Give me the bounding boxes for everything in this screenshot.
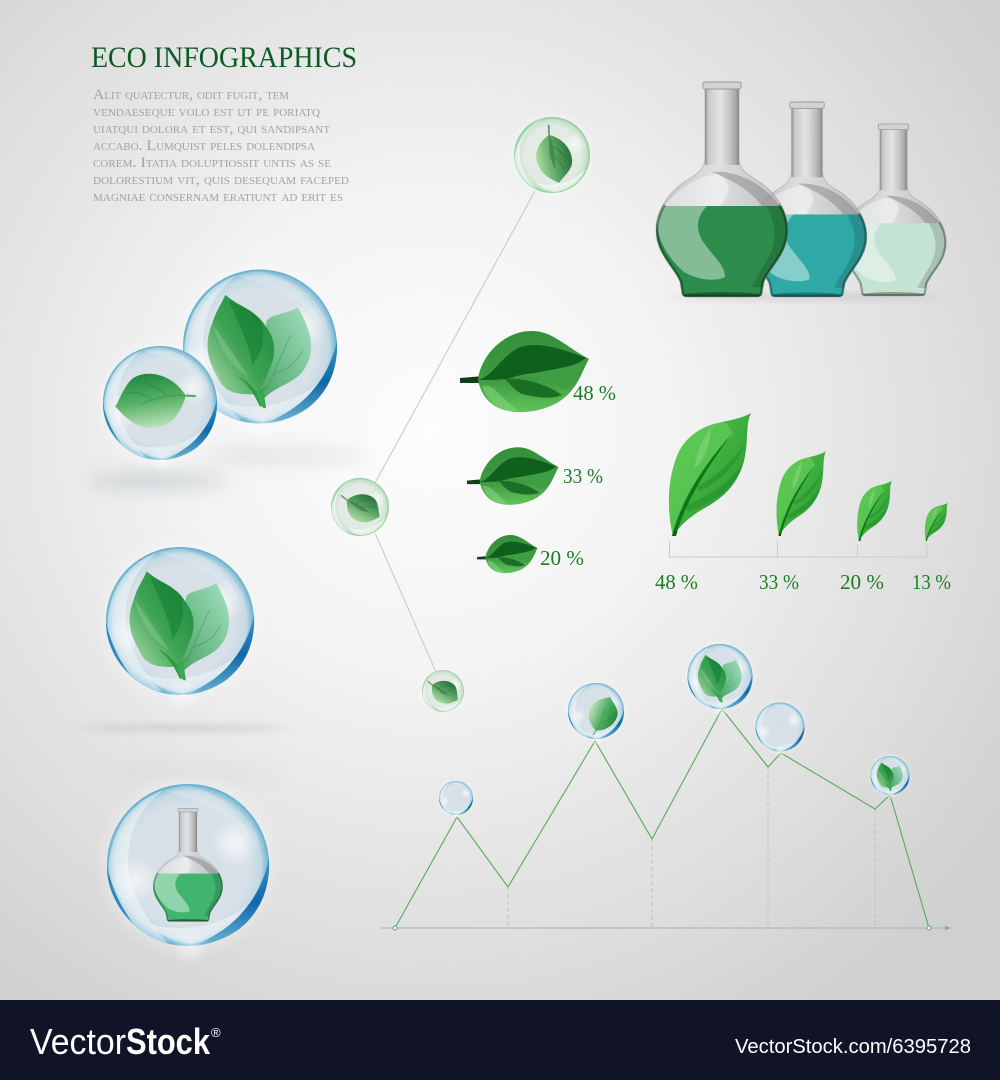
timeline bubble top (507, 110, 597, 200)
percentage labels: green leaves: 13 % (912, 570, 951, 594)
ground shadows (78, 449, 367, 779)
intro text block: Alit quatectur, odit fugit, tem (93, 87, 289, 103)
intro text block: dolorestium vit, quis desequam faceped (93, 172, 349, 188)
percentage labels: dark leaves (540, 381, 616, 570)
chart bubble 2 (563, 678, 629, 746)
intro text block: vendaeseque volo est ut pe poriatq (93, 104, 321, 120)
footer bar: Stock (126, 1021, 211, 1062)
flasks group (652, 82, 950, 301)
bracket (670, 541, 927, 557)
percentage labels: green leaves: 20 % (840, 570, 884, 594)
chart bubble 1 (436, 778, 476, 819)
intro text block: magniae consernam eratiunt ad erit es (93, 189, 343, 205)
line chart (381, 709, 951, 930)
connector lines (375, 191, 535, 672)
footer bar: VectorStock.com/6395728 (735, 1036, 971, 1058)
footer bar (0, 1000, 1000, 1080)
leaf size row: dark leaves (460, 331, 589, 573)
percentage labels: green leaves: 33 % (759, 570, 799, 594)
bright green leaves (669, 413, 948, 541)
intro text block: accabo. Lumquist peles dolendipsa (93, 138, 316, 154)
percentage labels: dark leaves: 48 % (573, 381, 616, 405)
title: ECO INFOGRAPHICS (91, 41, 357, 74)
chart bubble 3 (682, 638, 758, 717)
intro text block (93, 87, 349, 205)
bubble: two leaves middle left (93, 534, 267, 713)
chart bubble 5 (867, 752, 913, 800)
percentage labels: dark leaves: 20 % (540, 546, 584, 570)
footer bar: Vector (30, 1021, 126, 1062)
footer bar: ® (211, 1025, 221, 1040)
percentage labels: green leaves (655, 570, 951, 594)
timeline bubble middle (326, 473, 394, 541)
bubble: flask (92, 769, 284, 965)
percentage labels: dark leaves: 33 % (563, 464, 603, 488)
chart bubble 4 (751, 698, 809, 757)
timeline bubble bottom (418, 666, 468, 716)
percentage labels: green leaves: 48 % (655, 570, 698, 594)
large bubble: two leaves (169, 256, 351, 442)
small bubble: one leaf (93, 336, 227, 474)
intro text block: uiatqui dolora et est, qui sandipsant (93, 121, 330, 137)
intro text block: corem. Itatia doluptiossit untis as se (93, 155, 331, 171)
